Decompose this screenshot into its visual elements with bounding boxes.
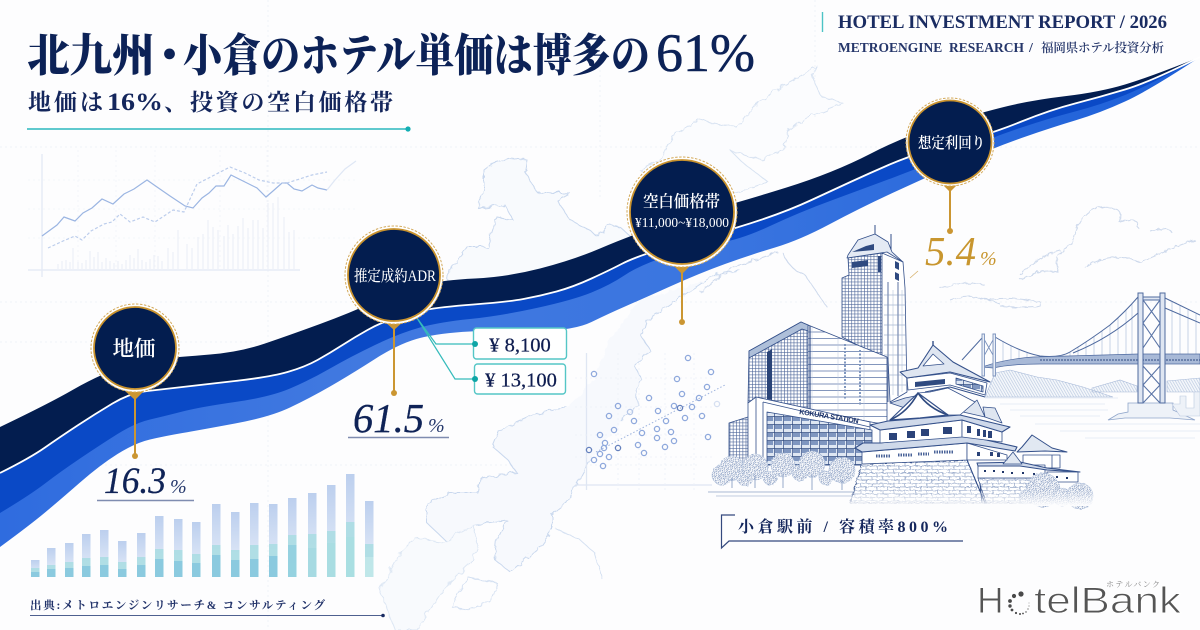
subtitle: 地価は — [28, 84, 103, 117]
price box: 8,100: ¥ 8,100 — [489, 334, 551, 356]
price box: 13,100: ¥ 13,100 — [485, 370, 557, 392]
circle badge — [906, 98, 994, 186]
castle: floor below top — [918, 388, 975, 415]
value: 16.3 — [104, 461, 166, 502]
castle: main wall — [880, 420, 962, 443]
clouds — [700, 207, 1195, 307]
map: upper right coast — [640, 67, 843, 205]
tower: high-rise — [842, 225, 907, 402]
castle: east annex — [977, 435, 1080, 482]
value: % — [170, 476, 187, 498]
callout: estimated ADR — [345, 226, 449, 441]
map: central land fill — [427, 270, 740, 572]
bridge: water lines — [985, 398, 1200, 438]
report subtitle: METROENGINE RESEARCH — [838, 41, 1024, 56]
castle: lower wall — [862, 443, 967, 464]
hotel: large building — [748, 322, 887, 425]
line chart: background trend lines — [28, 150, 356, 277]
main ribbon: rising navy and blue band — [0, 57, 1200, 547]
pin — [125, 391, 144, 459]
tree trunks and walkway — [708, 474, 860, 496]
logo wordmark: telBank — [1034, 580, 1182, 621]
castle: back eave — [890, 396, 915, 408]
ribbon: navy layer — [0, 57, 1200, 473]
title: 北九州 — [27, 19, 155, 84]
circle badge: 地価 — [112, 332, 156, 363]
value: % — [980, 248, 997, 270]
castle: main eave — [870, 415, 1010, 432]
map: lower left coast — [380, 525, 478, 630]
circle badge — [91, 304, 179, 392]
subtitle: 投資の空白価格帯 — [190, 84, 393, 117]
bars: teal middle — [31, 522, 374, 577]
circle badge — [627, 157, 737, 267]
bridge: pier — [1108, 403, 1195, 420]
location label: 小倉駅前 / 容積率800% — [738, 517, 948, 536]
logo dotted ring — [1008, 591, 1030, 615]
circle badge: 空白価格帯 — [643, 188, 720, 212]
ribbon: white highlight line — [0, 57, 1200, 473]
report subtitle: 福岡県ホテル投資分析 — [1041, 38, 1164, 56]
bridge: Kanmon strait suspension bridge — [962, 293, 1200, 438]
subtitle: 、 — [164, 84, 187, 117]
title underline — [27, 126, 411, 132]
price box: 13,100 — [472, 364, 566, 394]
logo kana: ホテルバンク — [1106, 580, 1160, 589]
value — [97, 461, 194, 502]
title: 小倉のホテル単価は博多の — [183, 19, 650, 84]
circle badge: 推定成約ADR — [354, 267, 437, 285]
title: ・ — [147, 19, 192, 84]
castle: main gable — [890, 393, 948, 420]
source note: 出典:メトロエンジンリサーチ& コンサルティング — [30, 598, 326, 612]
report title: HOTEL INVESTMENT REPORT / 2026 — [838, 13, 1167, 33]
pin — [673, 265, 691, 325]
ribbon: light blue layer — [0, 57, 1200, 547]
value: % — [428, 415, 445, 437]
logo wordmark: H — [977, 580, 1004, 621]
logo: HotelBank — [977, 580, 1182, 621]
bars: deep teal base — [31, 537, 374, 577]
map: central coast outline — [427, 270, 740, 572]
report header — [822, 12, 1167, 56]
source note — [30, 598, 385, 617]
value — [910, 228, 997, 278]
castle: Kokura Castle — [850, 341, 1080, 503]
scatter plot — [575, 353, 725, 490]
connectors: ADR price range — [417, 318, 475, 379]
station: Kokura Station — [729, 397, 872, 465]
circle badge: ¥11,000~¥18,000 — [635, 215, 729, 230]
map: upper coast — [447, 158, 640, 295]
castle: lower roof — [855, 433, 1017, 452]
castle: top roof — [900, 345, 990, 382]
value: 61.5 — [353, 395, 424, 441]
map: Kitakyushu region line-art background — [380, 67, 843, 630]
bridge: hangers — [1003, 302, 1196, 361]
circle badge: 想定利回り — [918, 131, 985, 153]
bridge: large tower — [1138, 293, 1165, 403]
ground fade — [700, 490, 1100, 506]
map: lower inlet — [452, 528, 603, 610]
castle: side gables — [963, 400, 1002, 423]
bridge: hills — [985, 370, 1200, 397]
station sign: KOKURA STATION — [799, 407, 859, 425]
bridge: deck — [982, 354, 1200, 368]
pin — [941, 183, 959, 234]
bar chart — [27, 474, 392, 580]
circle badge — [345, 226, 443, 324]
callout: land price — [91, 304, 194, 502]
illustration: Kokura landmarks — [700, 225, 1100, 509]
bridge: cables — [962, 297, 1200, 360]
callout: expected yield — [906, 98, 997, 278]
callout: vacant price band — [627, 157, 737, 325]
castle: lower east wall stone — [978, 478, 1045, 503]
price box: 8,100 — [472, 328, 566, 359]
pin — [384, 321, 404, 396]
bushes — [1019, 473, 1093, 509]
castle: stone base — [850, 460, 985, 503]
bridge: small tower — [982, 334, 996, 376]
ribbon: mid blue layer — [0, 57, 1200, 513]
report subtitle: / — [1028, 41, 1034, 56]
subtitle: 16% — [107, 89, 163, 116]
value: 5.4 — [925, 228, 976, 274]
castle: upper floor — [907, 373, 987, 395]
location label — [722, 515, 963, 548]
title: 61% — [656, 23, 755, 83]
bars: blue tops — [31, 474, 374, 577]
trees — [712, 451, 855, 486]
